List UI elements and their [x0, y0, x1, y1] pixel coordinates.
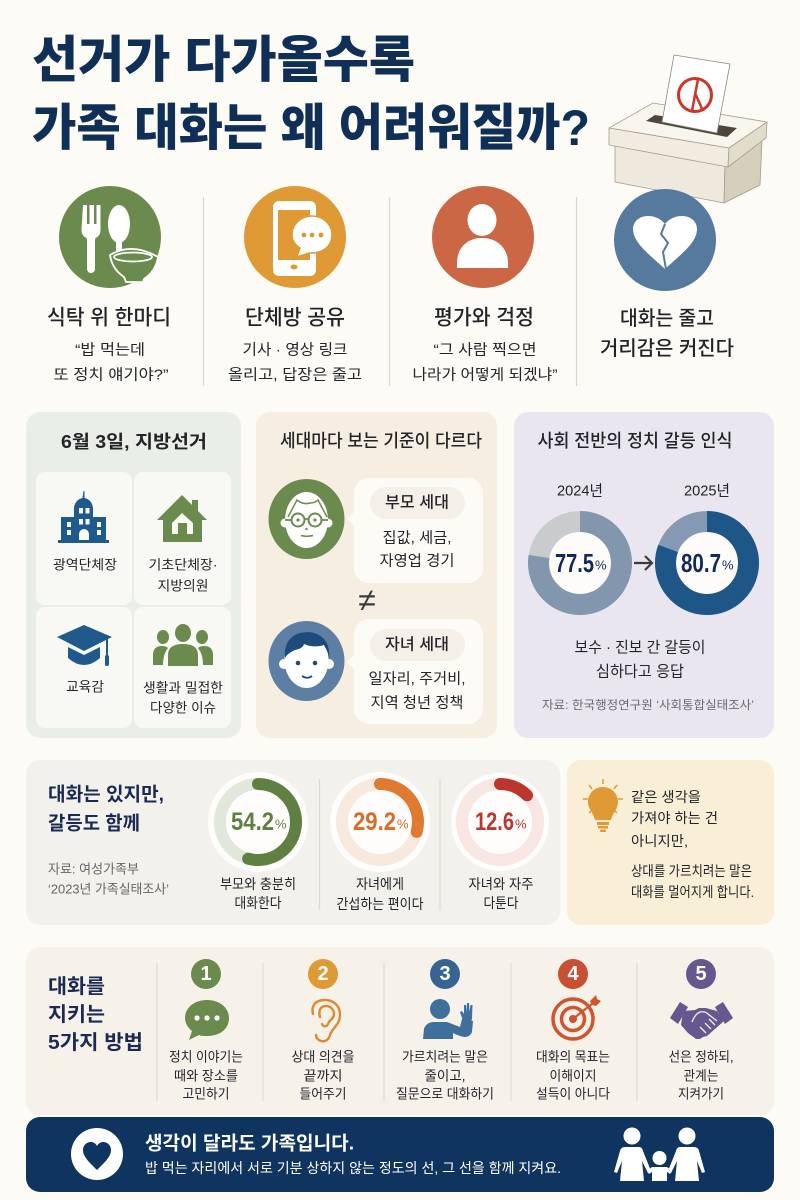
- text block: 상대를 가르치려는 말은: [631, 863, 752, 879]
- heading: 지키는: [48, 1003, 105, 1026]
- step 3: 가르치려는 말은: [402, 1050, 488, 1064]
- panel: five ways: [26, 947, 774, 1115]
- step 2: 끝까지: [304, 1068, 342, 1084]
- card: education: [36, 607, 132, 728]
- ring chart: 29.2: [330, 772, 430, 872]
- speech bubble: children: 지역 청년 정책: [370, 694, 464, 712]
- source: 자료: 한국행정연구원 ‘사회통합실태조사’: [542, 697, 754, 712]
- icon: parent avatar: [268, 479, 344, 559]
- speech bubble: children: 자녀 세대: [385, 636, 449, 654]
- label: 자녀와 자주: [468, 876, 534, 892]
- panel: scene 4 distance: [600, 189, 734, 360]
- heading: 단체방 공유: [245, 306, 345, 330]
- ring chart: 12.6: 12.6: [475, 808, 514, 836]
- ring chart: 12.6: [451, 773, 549, 871]
- step 1: 고민하기: [182, 1086, 230, 1102]
- step 2: 들어주기: [300, 1086, 346, 1102]
- text block: 나라가 어떻게 되겠냐”: [412, 366, 558, 384]
- card: metropolitan head: [36, 472, 132, 605]
- step 3: 질문으로 대화하기: [396, 1086, 494, 1102]
- text block: 가져야 하는 건: [631, 810, 718, 826]
- panel: scene 1 dinner table: [47, 186, 171, 384]
- icon: government building: [58, 491, 109, 543]
- text block: [600, 307, 734, 360]
- step 1: 1: [200, 963, 212, 985]
- not equal sign: ≠: [358, 582, 376, 618]
- ring chart: 54.2: [208, 772, 308, 872]
- step 2: 상대 의견을: [292, 1050, 354, 1064]
- speech bubble: children: 일자리, 주거비,: [368, 670, 466, 688]
- step 5: [668, 959, 734, 1102]
- donut chart: 2025: 80.7: [681, 548, 721, 578]
- ring chart: 54.2: %: [275, 816, 287, 832]
- label: 간섭하는 편이다: [336, 896, 424, 912]
- label: 자녀에게: [356, 876, 404, 892]
- heading: 6월 3일, 지방선거: [61, 432, 207, 452]
- ring chart: 29.2: 29.2: [353, 808, 396, 836]
- speech bubble: parents: 부모 세대: [385, 494, 449, 512]
- text block: [412, 342, 558, 384]
- icon: broken heart: [614, 189, 716, 291]
- heading: 식탁 위 한마디: [47, 306, 171, 330]
- panel: political conflict perception: [514, 412, 774, 738]
- title: [32, 32, 590, 156]
- step 4: 설득이 아니다: [536, 1086, 611, 1102]
- icon: handshake: [670, 1002, 733, 1039]
- donut chart: 2025: %: [722, 558, 734, 572]
- text block: 심하다고 응답: [596, 662, 684, 680]
- speech bubble: parents: [347, 478, 483, 583]
- text block: 또 정치 얘기야?”: [54, 366, 168, 384]
- speech bubble: children: [347, 619, 483, 724]
- banner text: 밥 먹는 자리에서 서로 기분 상하지 않는 정도의 선, 그 선을 함께 지켜요.: [145, 1160, 561, 1176]
- panel: scene 2 group chat: [228, 186, 362, 384]
- source: [48, 862, 169, 896]
- text block: [228, 342, 362, 384]
- step 1: 정치 이야기는: [169, 1050, 243, 1064]
- step 5: 5: [695, 963, 707, 985]
- text block: [574, 638, 706, 680]
- heading: 대화는 있지만,: [48, 784, 164, 806]
- card: everyday issues: [134, 607, 231, 728]
- icon: ear: [312, 1000, 340, 1041]
- step 1: [169, 959, 243, 1102]
- text block: [631, 789, 754, 900]
- speech bubble: parents: 자영업 경기: [380, 552, 454, 570]
- icon: phone chat: [244, 186, 346, 288]
- label: 다양한 이슈: [150, 700, 216, 716]
- step 2: [292, 959, 354, 1102]
- panel: generations: [256, 412, 497, 738]
- source: ‘2023년 가족실태조사’: [48, 882, 169, 896]
- icon: heart badge: [71, 1128, 123, 1180]
- icon: people: [153, 624, 213, 666]
- text block: 대화를 멀어지게 합니다.: [631, 884, 754, 900]
- icon: graduation cap: [57, 625, 112, 666]
- panel: conversation statistics: [26, 760, 560, 925]
- step 1: 때와 장소를: [174, 1068, 238, 1084]
- heading: 갈등도 함께: [48, 812, 140, 834]
- text block: “밥 먹는데: [75, 342, 145, 358]
- ring chart: 54.2: 54.2: [231, 808, 274, 836]
- step 4: 대화의 목표는: [536, 1050, 610, 1064]
- text block: 보수 · 진보 간 갈등이: [574, 638, 706, 656]
- label: [143, 680, 223, 716]
- icon: ballot stamp: [678, 78, 712, 112]
- text block: “그 사람 찍으면: [434, 342, 536, 358]
- ring chart: 12.6: %: [515, 816, 527, 832]
- label: 다툰다: [484, 895, 519, 911]
- label: 광역단체장: [53, 558, 117, 572]
- text block: [54, 342, 168, 384]
- heading: 세대마다 보는 기준이 다르다: [280, 431, 482, 451]
- icon: light bulb: [583, 779, 623, 832]
- title: 가족 대화는 왜 어려워질까?: [32, 100, 590, 156]
- card: local head: [134, 472, 231, 605]
- text block: 같은 생각을: [631, 789, 701, 805]
- label: 기초단체장·: [148, 558, 218, 572]
- speech bubble: parents: 집값, 세금,: [382, 530, 452, 546]
- heading: 대화를: [48, 975, 105, 998]
- donut chart: 2024: %: [595, 558, 607, 572]
- text block: 기사 · 영상 링크: [242, 342, 348, 358]
- step 3: [396, 959, 494, 1102]
- icon: person raising hand: [423, 999, 473, 1039]
- step 3: 줄이고,: [424, 1068, 466, 1084]
- arrow: [634, 556, 652, 570]
- icon: child avatar: [268, 621, 344, 701]
- text block: 대화는 줄고: [620, 307, 714, 330]
- label: 교육감: [66, 680, 104, 694]
- heading: [48, 784, 164, 834]
- step 2: 2: [317, 963, 329, 985]
- label: [336, 876, 424, 912]
- label: 지방의원: [158, 578, 208, 594]
- label: [220, 876, 296, 911]
- label: 부모와 충분히: [220, 876, 296, 892]
- source: 자료: 여성가족부: [48, 862, 139, 876]
- label: [148, 558, 218, 594]
- label: 2025: 2025년: [684, 482, 730, 500]
- panel: tip callout: [567, 760, 774, 925]
- step 4: 이해이지: [550, 1068, 596, 1084]
- icon: family: [614, 1128, 705, 1181]
- heading: 5가지 방법: [48, 1031, 143, 1054]
- icon: house: [157, 495, 207, 542]
- label: 생활과 밀접한: [143, 680, 223, 696]
- donut chart: 2025: [655, 511, 759, 615]
- banner heading: 생각이 달라도 가족입니다.: [145, 1132, 354, 1154]
- step 4: 4: [567, 963, 579, 985]
- heading: [48, 975, 143, 1054]
- panel: local election: [26, 412, 241, 738]
- ring chart: 29.2: %: [397, 816, 409, 832]
- heading: 평가와 걱정: [434, 306, 534, 330]
- label: 2024: 2024년: [557, 482, 603, 500]
- banner: [26, 1117, 774, 1192]
- text block: 올리고, 답장은 줄고: [228, 366, 362, 384]
- step 5: 관계는: [684, 1068, 718, 1084]
- icon: person: [432, 186, 534, 288]
- text block: 아니지만,: [631, 833, 688, 849]
- text block: 거리감은 커진다: [600, 337, 734, 360]
- step 4: [536, 959, 611, 1102]
- label: 대화한다: [234, 895, 282, 911]
- icon: ballot box: [609, 55, 767, 203]
- step 3: 3: [439, 963, 451, 985]
- icon: fork spoon bowl: [59, 186, 161, 288]
- panel: scene 3 judgement: [412, 186, 558, 384]
- icon: target: [553, 995, 601, 1039]
- step 5: 선은 정하되,: [668, 1050, 734, 1064]
- donut chart: 2024: [528, 511, 632, 615]
- step 5: 지켜가기: [678, 1086, 724, 1102]
- label: [468, 876, 534, 911]
- heading: 사회 전반의 정치 갈등 인식: [538, 431, 732, 451]
- donut chart: 2024: 77.5: [555, 548, 594, 578]
- title: 선거가 다가올수록: [32, 32, 415, 88]
- icon: chat bubble: [185, 1000, 229, 1040]
